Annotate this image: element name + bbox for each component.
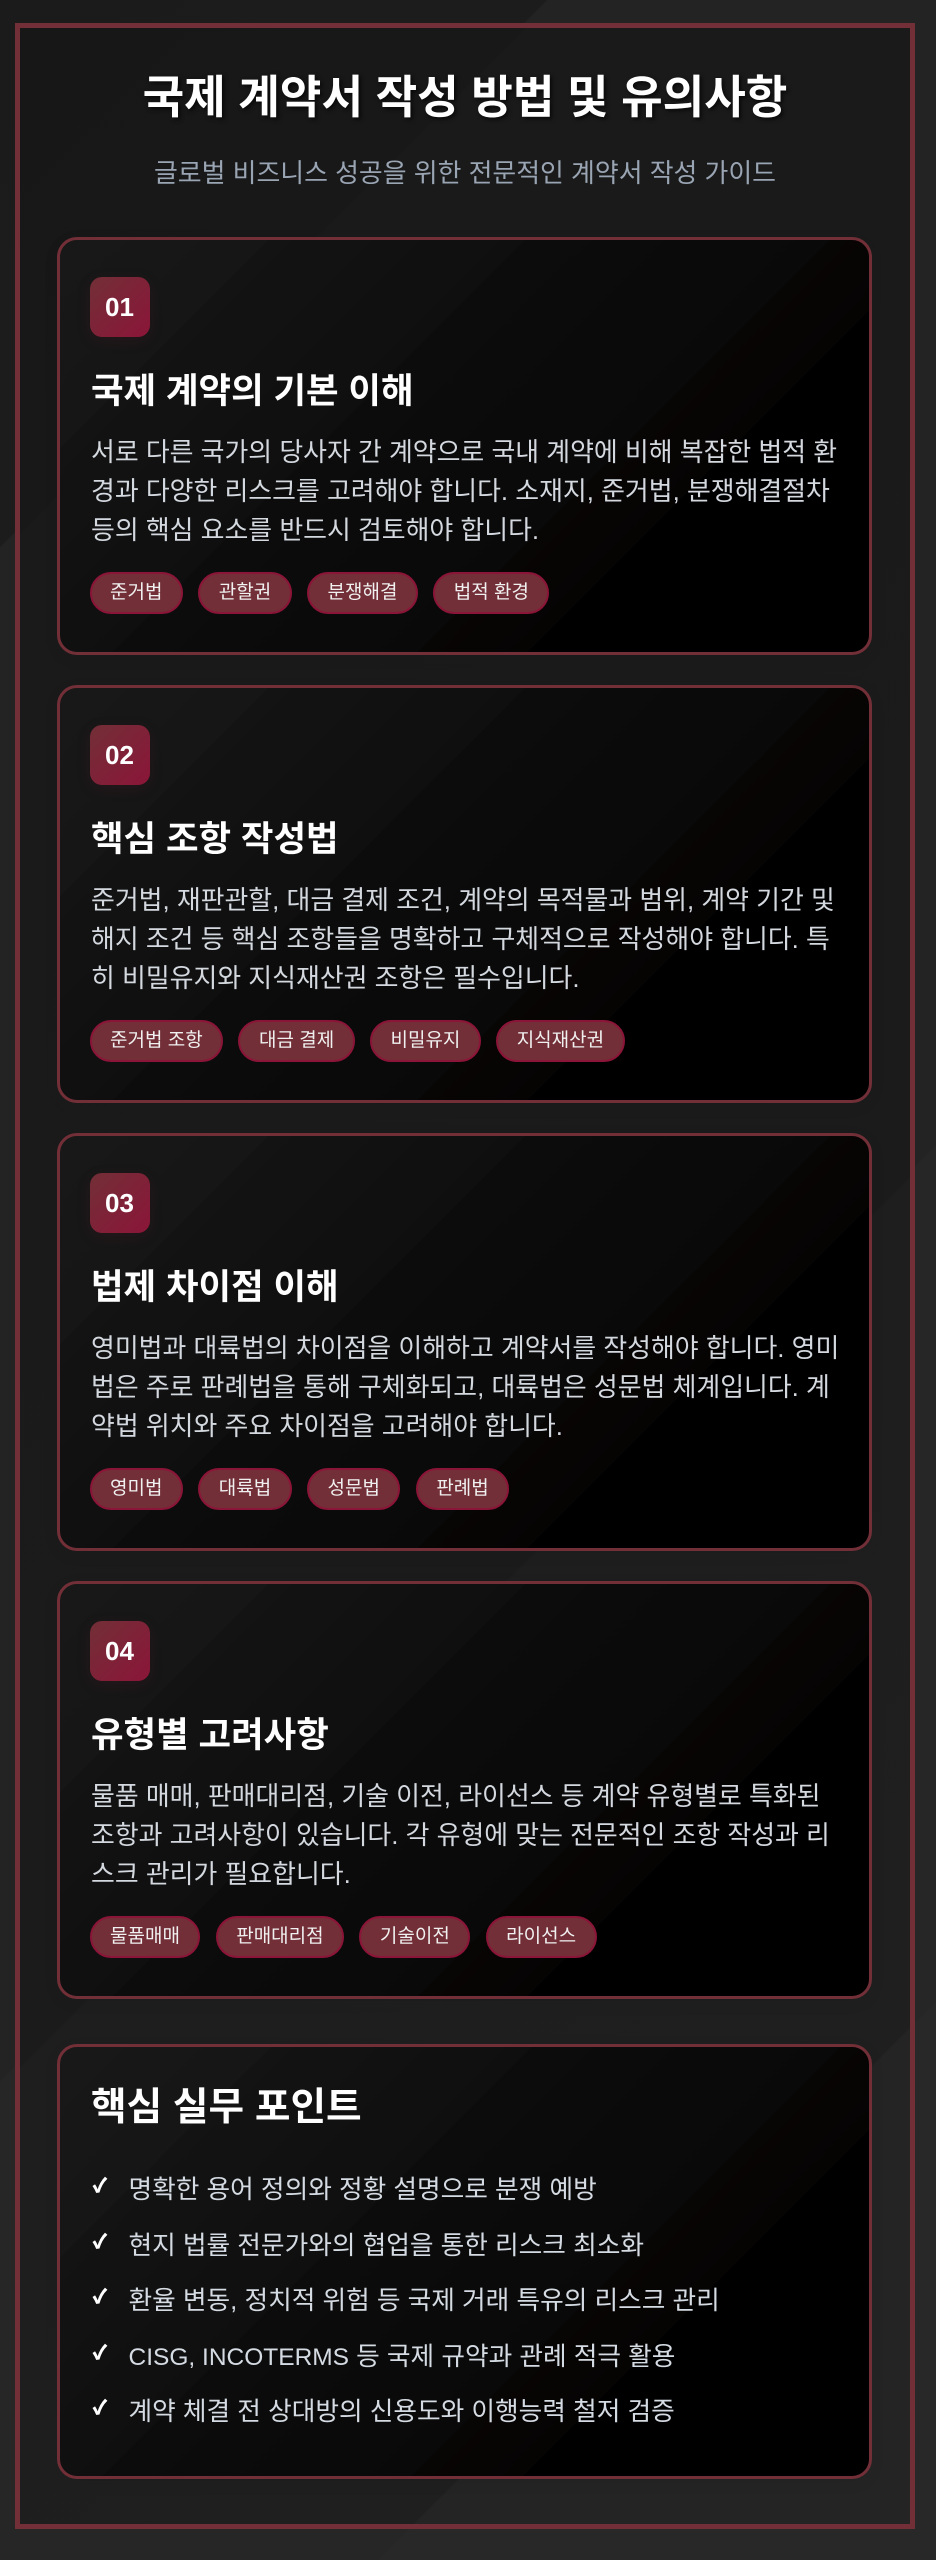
heading 03: 법제 차이점 이해	[91, 1267, 339, 1307]
text block 04: 스크 관리가 필요합니다.	[91, 1860, 351, 1888]
text block 01: 경과 다양한 리스크를 고려해야 합니다. 소재지, 준거법, 분쟁해결절차	[91, 478, 830, 506]
text block 03	[91, 1334, 839, 1440]
text block 04: 조항과 고려사항이 있습니다. 각 유형에 맞는 전문적인 조항 작성과 리	[91, 1822, 830, 1850]
tags 01: 법적 환경	[454, 582, 529, 603]
heading: key points: 핵심 실무 포인트	[91, 2086, 362, 2129]
heading 02: 핵심 조항 작성법	[91, 819, 339, 859]
badge 03: 03	[105, 1188, 134, 1218]
list item 5: ✓	[93, 2398, 107, 2419]
tags 03: 성문법	[328, 1478, 380, 1499]
tags 03: 대륙법	[219, 1478, 271, 1499]
text block 01	[91, 438, 837, 544]
tags 04	[90, 1916, 597, 1958]
tags 04: 라이선스	[506, 1926, 576, 1947]
text block 02	[91, 886, 835, 992]
list item 2: ✓	[93, 2232, 107, 2253]
tags 02: 지식재산권	[517, 1030, 604, 1051]
list item 3: 환율 변동, 정치적 위험 등 국제 거래 특유의 리스크 관리	[128, 2287, 720, 2315]
list item 4: ✓	[93, 2343, 107, 2364]
list item 1: 명확한 용어 정의와 정황 설명으로 분쟁 예방	[128, 2176, 597, 2204]
heading 04: 유형별 고려사항	[91, 1715, 329, 1755]
tags 04: 판매대리점	[236, 1926, 324, 1947]
badge 04: 04	[105, 1636, 134, 1666]
text block 03: 약법 위치와 주요 차이점을 고려해야 합니다.	[91, 1412, 563, 1440]
panel: card 02	[57, 685, 872, 1103]
list item 3: ✓	[93, 2287, 107, 2308]
tags 04: 물품매매	[110, 1926, 180, 1947]
tags 02	[90, 1020, 625, 1062]
text block 03: 영미법과 대륙법의 차이점을 이해하고 계약서를 작성해야 합니다. 영미	[91, 1334, 839, 1362]
text block 02: 해지 조건 등 핵심 조항들을 명확하고 구체적으로 작성해야 합니다. 특	[91, 926, 830, 954]
tags 02: 준거법 조항	[110, 1030, 203, 1051]
text block 02: 준거법, 재판관할, 대금 결제 조건, 계약의 목적물과 범위, 계약 기간 및	[91, 886, 835, 914]
text block 04: 물품 매매, 판매대리점, 기술 이전, 라이선스 등 계약 유형별로 특화된	[91, 1782, 820, 1810]
tags 02: 비밀유지	[390, 1030, 460, 1051]
badge 04	[90, 1621, 150, 1681]
title: 국제 계약서 작성 방법 및 유의사항	[143, 72, 787, 123]
list item 5: 계약 체결 전 상대방의 신용도와 이행능력 철저 검증	[128, 2398, 675, 2426]
text block 02: 히 비밀유지와 지식재산권 조항은 필수입니다.	[91, 964, 580, 992]
badge 01	[90, 277, 150, 337]
list item 1: ✓	[93, 2176, 107, 2197]
badge 03	[90, 1173, 150, 1233]
list item 2: 현지 법률 전문가와의 협업을 통한 리스크 최소화	[128, 2232, 644, 2260]
tags 03	[90, 1468, 509, 1510]
list item 4: CISG, INCOTERMS 등 국제 규약과 관례 적극 활용	[128, 2343, 675, 2371]
tags 03: 영미법	[110, 1478, 162, 1499]
tags 01: 관할권	[219, 582, 271, 603]
text block 03: 법은 주로 판례법을 통해 구체화되고, 대륙법은 성문법 체계입니다. 계	[91, 1374, 830, 1402]
tags 04: 기술이전	[380, 1926, 450, 1947]
subtitle: 글로벌 비즈니스 성공을 위한 전문적인 계약서 작성 가이드	[154, 160, 776, 188]
panel: card 03	[57, 1133, 872, 1551]
tags 01	[90, 572, 549, 614]
text block 04	[91, 1782, 830, 1888]
text block 01: 서로 다른 국가의 당사자 간 계약으로 국내 계약에 비해 복잡한 법적 환	[91, 438, 837, 466]
tags 02: 대금 결제	[259, 1030, 334, 1051]
badge 02: 02	[105, 740, 134, 770]
panel: card 04	[57, 1581, 872, 1999]
tags 01: 분쟁해결	[328, 582, 397, 603]
panel: key practice points	[57, 2044, 872, 2479]
tags 01: 준거법	[110, 582, 162, 603]
heading 01: 국제 계약의 기본 이해	[91, 371, 414, 411]
tags 03: 판례법	[436, 1478, 489, 1499]
badge 01: 01	[105, 292, 134, 322]
badge 02	[90, 725, 150, 785]
text block 01: 등의 핵심 요소를 반드시 검토해야 합니다.	[91, 516, 539, 544]
panel: card 01	[57, 237, 872, 655]
